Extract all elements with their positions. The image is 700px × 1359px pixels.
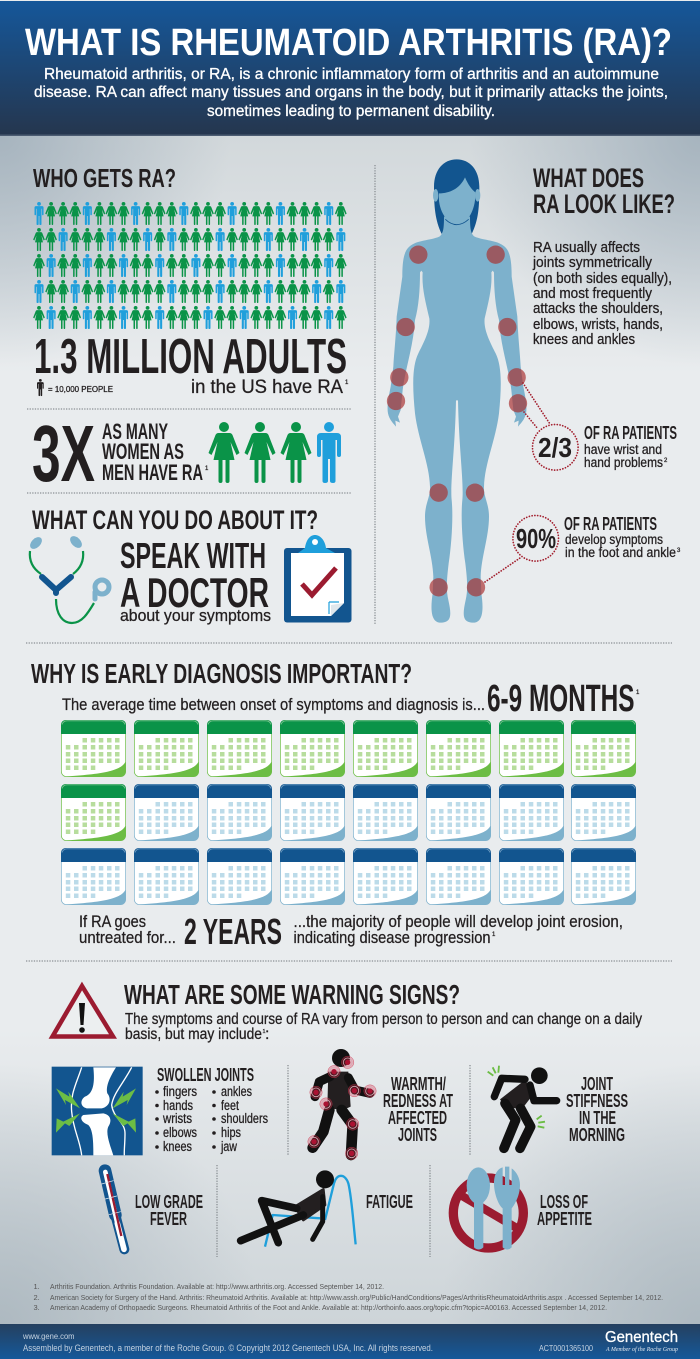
text: as many women as men have RA: WOMEN AS <box>102 439 184 464</box>
text: joint stiffness: IN THE <box>579 1108 616 1128</box>
callout: 90% of RA patients <box>485 514 681 582</box>
text: symptoms vary <box>125 1011 642 1043</box>
references <box>34 1282 663 1312</box>
stat: 2 years: 2 YEARS <box>184 911 282 952</box>
illustration: woman's body with joints <box>387 159 527 623</box>
references: Arthritis Foundation. Arthritis Foundation. Available at: http://www.arthritis.org. Accessed September 14, 2012. <box>50 1282 384 1291</box>
text: joint stiffness: JOINT <box>581 1074 613 1094</box>
text: symmetry description: (on both sides equally), <box>533 271 672 287</box>
text: loss of appetite <box>537 1192 592 1229</box>
stat: 1.3 million adults: 1.3 MILLION ADULTS <box>34 330 347 384</box>
text: as many women as men have RA: AS MANY <box>102 419 168 444</box>
callout: 2/3 of RA patients: 2 <box>664 458 668 464</box>
icon: thermometer <box>102 1171 124 1249</box>
text: warmth redness: AFFECTED <box>388 1108 447 1128</box>
text: joint erosion <box>294 912 623 947</box>
text: if RA goes untreated: If RA goes <box>79 912 146 931</box>
text: low grade fever: FEVER <box>150 1209 187 1229</box>
heading: warning signs: WHAT ARE SOME WARNING SIGNS? <box>124 979 460 1010</box>
text: low grade fever: LOW GRADE <box>135 1192 203 1212</box>
callout: 2/3 of RA patients: have wrist and <box>584 442 662 457</box>
references: 1. <box>34 1282 40 1291</box>
icon: fatigued figure on chair <box>241 1170 356 1247</box>
heading: what does RA look like: WHAT DOES <box>533 163 644 193</box>
icon: no spoon and fork <box>453 1167 523 1249</box>
callout: 2/3 of RA patients: 2/3 <box>538 432 572 463</box>
intro paragraph: disease. RA can affect many tissues and organs in the body, but it primarily attacks the joints, <box>34 84 668 101</box>
text: swollen joints list: shoulders <box>221 1111 268 1126</box>
logo: Genentech: Genentech <box>605 1329 678 1346</box>
caption: in the US have RA: 1 <box>345 380 349 386</box>
text: symmetry description: attacks the shoulders, <box>533 301 663 317</box>
text: loss of appetite: LOSS OF <box>540 1192 588 1212</box>
intro paragraph: sometimes leading to permanent disability. <box>207 103 495 120</box>
text: symptoms vary: : <box>265 1026 269 1043</box>
references: 3. <box>34 1303 40 1312</box>
text: average time: The average time between onset of symptoms and diagnosis is... <box>62 695 485 714</box>
caption: in the US have RA: in the US have RA <box>191 377 343 398</box>
text: swollen joints list <box>155 1065 268 1154</box>
heading: what can you do: WHAT CAN YOU DO ABOUT IT? <box>32 505 318 535</box>
text: swollen joints list: SWOLLEN JOINTS <box>157 1065 254 1085</box>
panel: what does RA look like <box>387 159 681 623</box>
text: symmetry description: elbows, wrists, hands, <box>533 317 663 333</box>
legend text: = 10,000 PEOPLE <box>48 384 113 394</box>
icon: figure with red joints <box>308 1049 376 1160</box>
text: joint stiffness: MORNING <box>569 1125 625 1145</box>
footer <box>0 1324 700 1359</box>
text: speak with a doctor: A DOCTOR <box>120 569 269 616</box>
callout: 90% of RA patients: 3 <box>677 548 681 554</box>
text: symmetry description: joints symmetrically <box>532 255 653 271</box>
logo: Genentech: A Member of the Roche Group <box>605 1346 679 1353</box>
text: joint stiffness <box>566 1074 628 1145</box>
job code: ACT0001365100 <box>539 1344 593 1353</box>
stat: 6-9 months: 1 <box>636 690 640 696</box>
text: symptoms vary: 1 <box>262 1029 266 1035</box>
text: symmetry description: knees and ankles <box>533 332 635 348</box>
text: swollen joints list: feet <box>221 1098 239 1113</box>
text: fatigue: FATIGUE <box>366 1192 413 1212</box>
callout: 90% of RA patients: develop symptoms <box>565 532 663 547</box>
callout: 2/3 of RA patients <box>523 383 677 470</box>
text: as many women as men have RA: 1 <box>205 466 209 472</box>
text: joint erosion: indicating disease progression <box>294 928 490 947</box>
text: speak with a doctor: SPEAK WITH <box>120 535 266 576</box>
text: swollen joints list: hands <box>163 1098 193 1113</box>
text: swollen joints list: ankles <box>221 1084 252 1099</box>
callout: 90% of RA patients: 90% <box>516 523 556 554</box>
heading: what does RA look like <box>533 163 675 219</box>
intro paragraph: Rheumatoid arthritis, or RA, is a chronic inflammatory form of arthritis and an autoimmune <box>44 66 659 83</box>
icon: three women and one man <box>208 422 341 483</box>
text: warmth redness <box>383 1074 453 1145</box>
icon: stiff bent figure <box>488 1066 557 1148</box>
text: if RA goes untreated <box>79 912 176 947</box>
references: American Academy of Orthopaedic Surgeons. Rheumatoid Arthritis of the Foot and Ankle. Available at: http://orthoinfo.aaos.org/topic.cfm?topic=A00163. Accessed September 14, 2012. <box>50 1303 607 1312</box>
references: 2. <box>34 1293 40 1302</box>
text: joint erosion: 1 <box>492 932 496 938</box>
text: symmetry description <box>532 240 672 348</box>
text: warmth redness: REDNESS AT <box>383 1091 453 1111</box>
header banner <box>0 1 700 136</box>
text: symmetry description: and most frequently <box>533 286 653 302</box>
text: symmetry description: RA usually affects <box>533 240 640 256</box>
text: low grade fever <box>135 1192 203 1229</box>
panel: what can you do about it <box>28 505 351 625</box>
text: warmth redness: WARMTH/ <box>391 1074 446 1094</box>
panel: who gets RA <box>33 163 349 398</box>
text: loss of appetite: APPETITE <box>537 1209 592 1229</box>
text: joint erosion: ...the majority of people will develop joint erosion, <box>294 912 623 931</box>
text: joint stiffness: STIFFNESS <box>566 1091 628 1111</box>
callout: 2/3 of RA patients: hand problems <box>584 455 663 470</box>
text: swollen joints list: wrists <box>162 1111 192 1126</box>
copyright: Assembled by Genentech, a member of the Roche Group. © Copyright 2012 Genentech USA, Inc. All rights reserved. <box>23 1343 433 1354</box>
calendars grid <box>61 720 636 905</box>
icon: warning triangle <box>52 986 113 1036</box>
icon: legend figure <box>37 379 44 396</box>
text: if RA goes untreated: untreated for... <box>79 928 176 947</box>
icon: stethoscope <box>28 534 109 623</box>
text: speak with a doctor: about your symptoms <box>120 607 271 625</box>
footer url: www.gene.com <box>22 1331 74 1341</box>
text: as many women as men have RA <box>102 419 209 485</box>
intro paragraph <box>34 66 668 120</box>
text: swollen joints list: knees <box>163 1139 192 1154</box>
text: swollen joints list: elbows <box>163 1125 197 1140</box>
text: swollen joints list: fingers <box>163 1084 197 1099</box>
text: symptoms vary: basis, but may include <box>125 1026 262 1043</box>
logo: Genentech <box>605 1329 679 1353</box>
text: swollen joints list: hips <box>221 1125 241 1140</box>
icon: clipboard with check mark <box>284 535 352 622</box>
icon: swollen knee joint <box>52 1067 143 1155</box>
pictogram: people grid <box>33 202 347 329</box>
text: speak with a doctor <box>120 535 271 625</box>
panel: warning signs <box>52 979 642 1257</box>
heading: early diagnosis: WHY IS EARLY DIAGNOSIS IMPORTANT? <box>31 658 412 689</box>
panel: 3x as many women <box>32 409 341 498</box>
text: warmth redness: JOINTS <box>398 1125 437 1145</box>
text: as many women as men have RA: MEN HAVE RA <box>102 460 203 485</box>
text: swollen joints list: jaw <box>220 1139 237 1154</box>
callout: 90% of RA patients: in the foot and ankle <box>565 545 676 560</box>
heading: who gets RA: WHO GETS RA? <box>33 163 176 193</box>
stat: 3X: 3X <box>32 409 95 498</box>
panel: why is early diagnosis important <box>31 658 640 952</box>
